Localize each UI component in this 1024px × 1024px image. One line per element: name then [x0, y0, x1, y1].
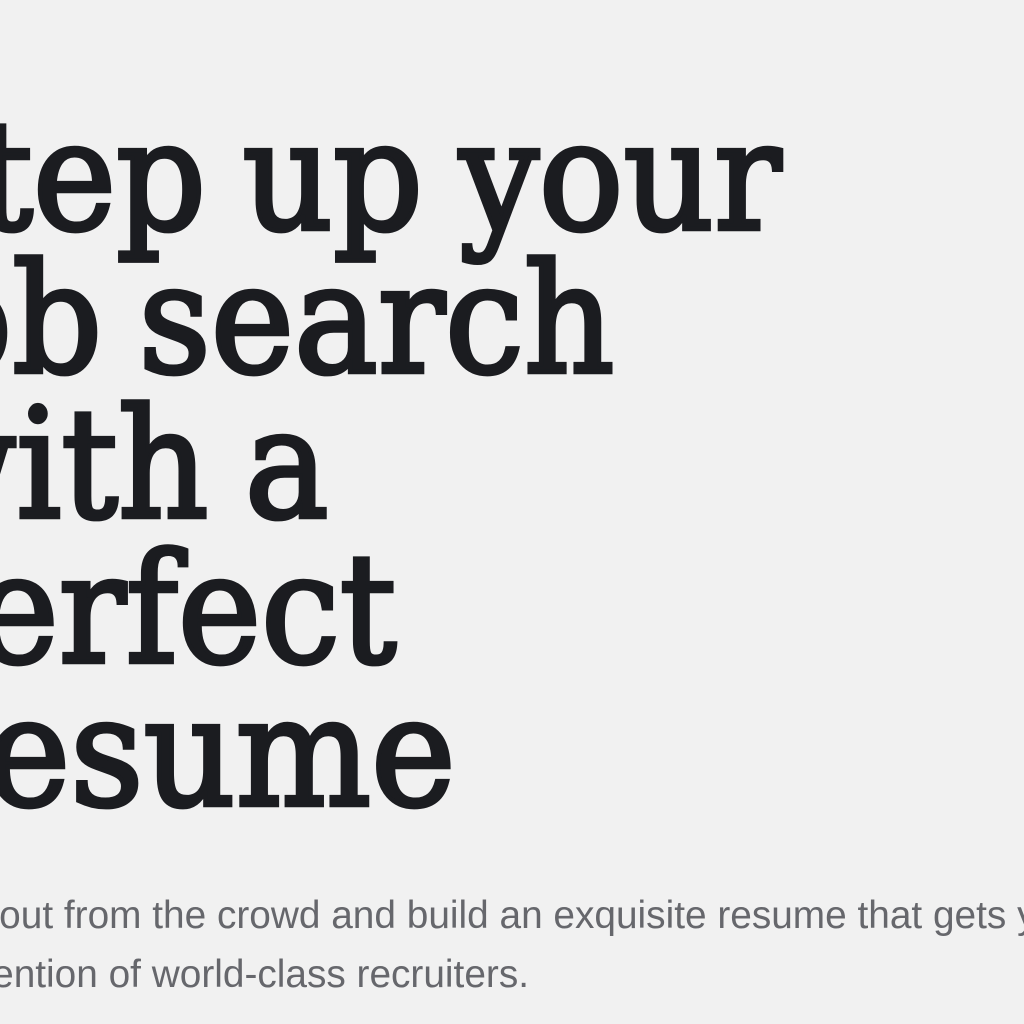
subtitle text — [0, 894, 1024, 996]
